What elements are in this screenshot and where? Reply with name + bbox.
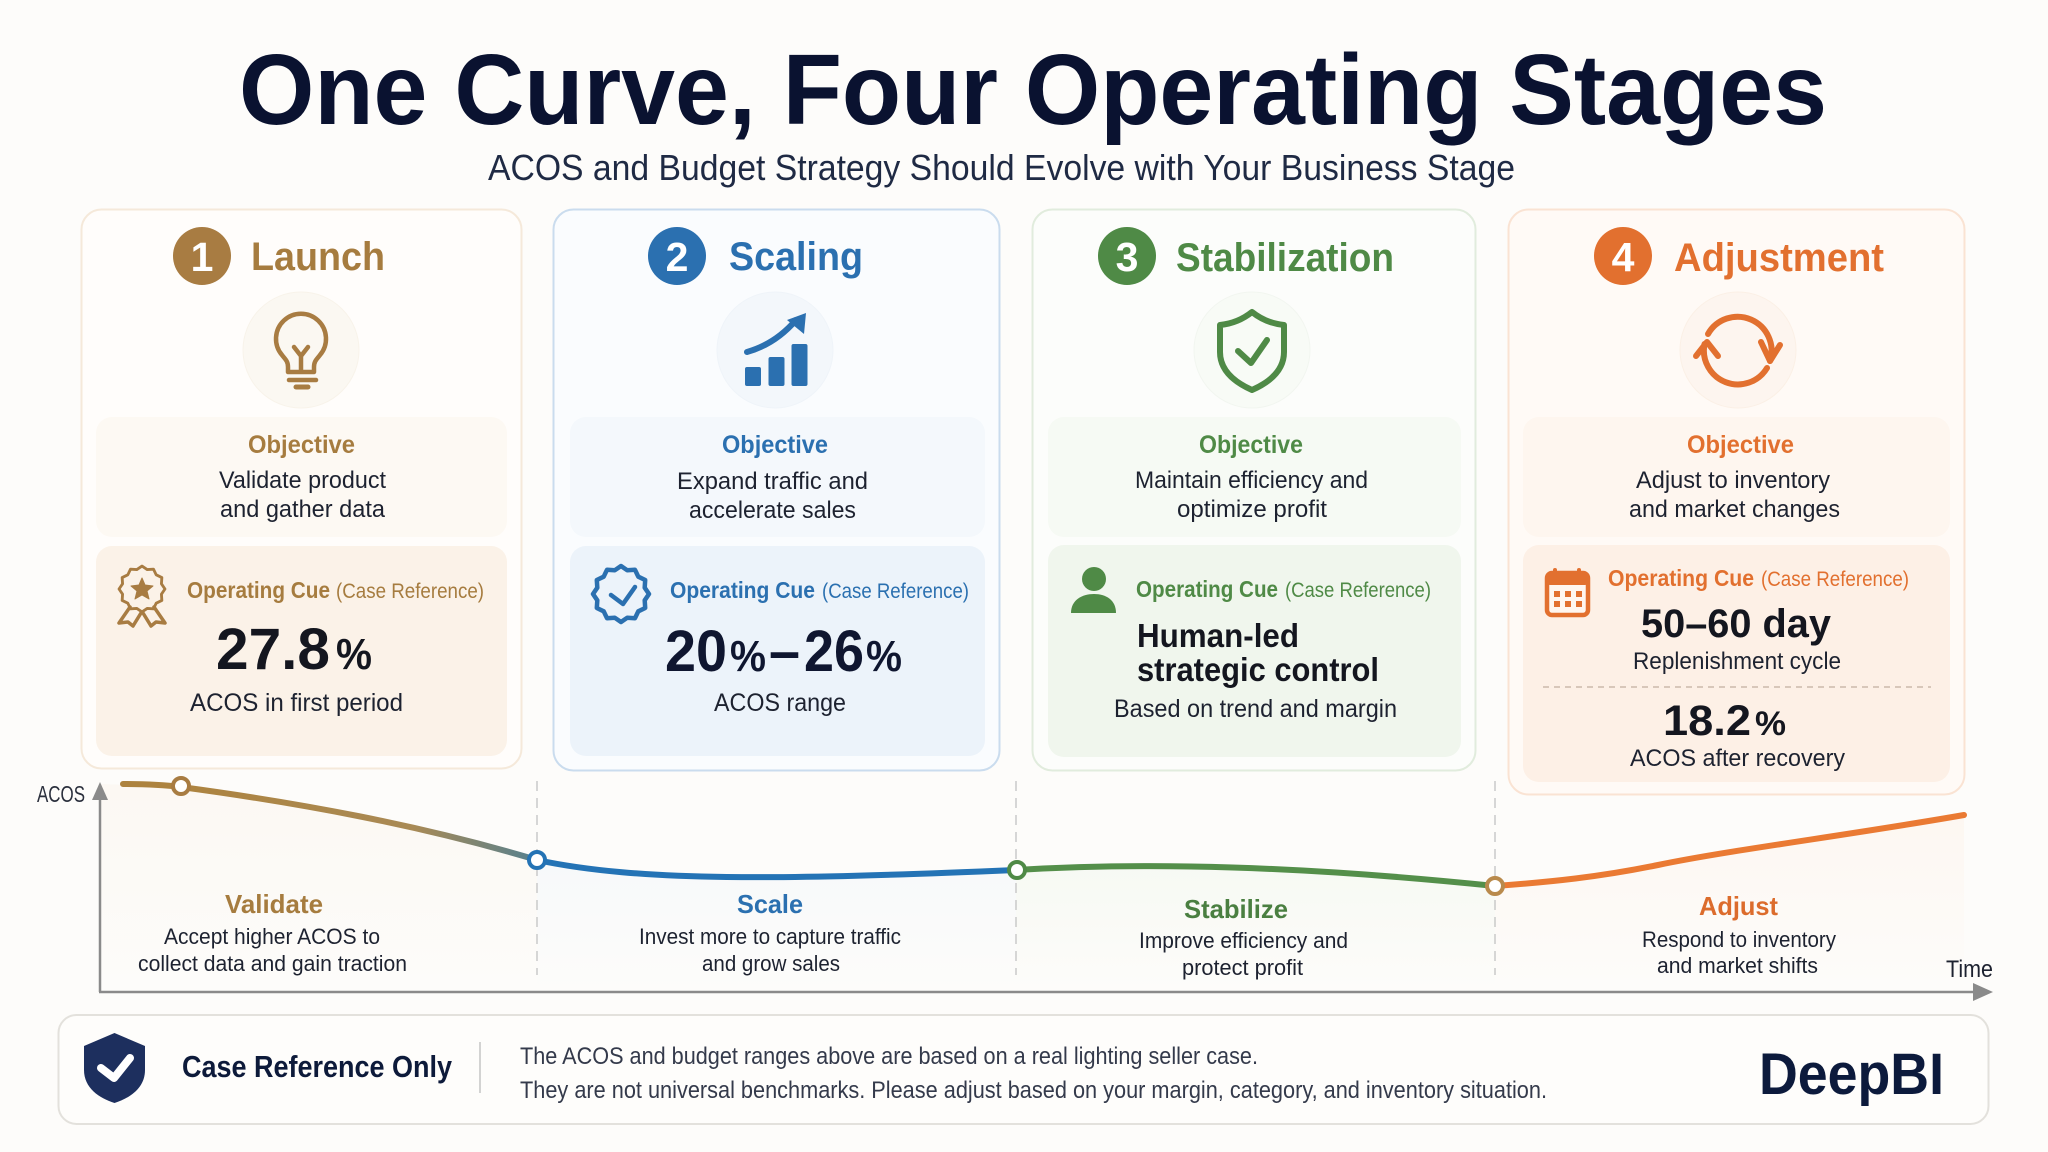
panel: objective: Expand traffic and [677,468,868,495]
panel: objective: optimize profit [1177,496,1327,523]
axis: time x axis [99,956,1993,1001]
text: scale: Invest more to capture traffic [639,924,901,949]
badge: number 2 [648,227,706,285]
badge: number 4 [1594,227,1652,285]
axis: ACOS y axis: ACOS [37,781,85,807]
text: validate: Accept higher ACOS to [164,924,380,949]
panel: operating cue: ACOS range [714,689,846,717]
panel: operating cue: Replenishment cycle [1633,648,1841,675]
panel: stage 2 scaling [554,210,1000,770]
badge: number 1 [173,227,231,285]
curve: validate segment [123,784,537,860]
badge: number 2: 2 [666,234,688,280]
stat: human-led strategic control: strategic control [1137,651,1379,688]
disclaimer text [520,1043,1547,1104]
stat: 20%–26%: 20 [665,619,727,684]
panel: objective [1048,417,1461,537]
panel: stage 1 launch [82,210,522,768]
heading: Stabilization: Stabilization [1176,236,1394,280]
icon: verified badge [593,566,649,622]
text: adjust: and market shifts [1657,953,1818,978]
heading: Adjustment: Adjustment [1674,236,1884,280]
panel: objective: Objective [1199,431,1303,459]
panel: stage 4 adjustment [1508,210,1964,794]
chart: ACOS curve over time [37,778,1993,1001]
curve: scale segment [537,860,1016,877]
text: validate: collect data and gain traction [138,951,407,976]
icon: calendar [1546,568,1589,615]
stat: 18.2%: 18.2 [1663,697,1751,745]
panel: objective: and gather data [220,496,386,523]
panel: objective: Objective [248,431,355,459]
stat: 20%–26% [665,619,902,684]
text: scale: Scale [737,889,803,919]
badge: number 3 [1098,227,1156,285]
markers: stage nodes [173,778,1503,894]
disclaimer text: The ACOS and budget ranges above are based on a real lighting seller case. [520,1043,1258,1070]
panel: objective [570,417,985,537]
heading: case reference only: Case Reference Only [182,1049,453,1084]
panel: operating cue: (Case Reference) [1761,568,1909,591]
panel: operating cue [1048,545,1461,757]
panel: objective: Maintain efficiency and [1135,467,1368,494]
stat: 50–60 day: 50–60 day [1641,602,1832,646]
icon: refresh cycle [1680,292,1796,408]
panel: operating cue: Based on trend and margin [1114,695,1397,723]
panel: operating cue: Operating Cue [670,577,815,603]
panel: operating cue: (Case Reference) [1285,579,1431,602]
panel: operating cue: (Case Reference) [822,580,969,603]
stat: 27.8%: % [336,630,372,679]
icon: shield check [1194,292,1310,408]
panel: operating cue: ACOS after recovery [1630,745,1845,772]
panel: operating cue [96,546,507,756]
title: One Curve, Four Operating Stages [239,34,1827,146]
icon: award rosette [119,566,165,626]
panel: objective: Validate product [219,467,386,494]
panel: operating cue: Operating Cue [187,577,330,603]
stat: 18.2%: % [1755,705,1786,743]
text: adjust [1642,891,1836,978]
panel: objective: Objective [1687,431,1794,459]
icon: navy shield check [84,1033,145,1103]
text: stabilize: Stabilize [1184,894,1288,924]
panel: objective [96,417,507,537]
text: adjust: Adjust [1699,891,1778,921]
panel: objective: Objective [722,431,828,459]
stat: 20%–26%: % [866,632,902,681]
text: scale [639,889,901,976]
stat: 20%–26%: – [769,619,800,684]
text: validate [138,889,407,976]
text: stabilize: protect profit [1182,955,1303,980]
heading: Scaling: Scaling [729,235,863,279]
panel: case reference footer [58,1015,1988,1124]
stat: 18.2% [1663,697,1786,745]
badge: number 3: 3 [1116,234,1138,280]
panel: objective: and market changes [1629,496,1840,523]
badge: number 4: 4 [1612,234,1635,280]
text: scale: and grow sales [702,951,840,976]
panel: operating cue: Operating Cue [1136,576,1278,602]
subtitle: ACOS and Budget Strategy Should Evolve with Your Business Stage [488,147,1515,188]
panel: operating cue: (Case Reference) [336,580,484,603]
disclaimer text: They are not universal benchmarks. Please adjust based on your margin, category, and inventory situation. [520,1077,1547,1104]
badge: number 1: 1 [191,234,213,280]
panel: operating cue: Operating Cue [1608,565,1754,591]
logo: DeepBI: DeepBI [1759,1042,1944,1107]
stat: 20%–26%: 26 [804,619,864,684]
axis: time x axis: Time [1946,956,1993,983]
icon: person [1071,567,1116,613]
panel: objective [1523,417,1950,537]
heading: Launch: Launch [251,235,385,279]
panel: operating cue [570,546,985,756]
panel: stage 3 stabilization [1032,210,1476,770]
text: validate: Validate [225,889,323,919]
stat: 27.8%: 27.8 [216,617,330,682]
icon: light bulb [243,292,359,408]
panel: operating cue [1523,545,1950,782]
stat: 20%–26%: % [730,632,766,681]
stat: human-led strategic control: Human-led [1137,617,1299,654]
text: adjust: Respond to inventory [1642,927,1836,952]
panel: objective: accelerate sales [689,497,856,524]
text: stabilize: Improve efficiency and [1139,928,1348,953]
panel: objective: Adjust to inventory [1636,467,1830,494]
stat: human-led strategic control [1137,617,1379,688]
icon: rising bar chart [717,292,833,408]
axis: ACOS y axis [37,781,108,992]
curve: stabilize segment [1016,866,1495,886]
panel: operating cue: ACOS in first period [190,689,403,717]
curve: adjust segment [1495,815,1964,886]
text: stabilize [1139,894,1348,980]
